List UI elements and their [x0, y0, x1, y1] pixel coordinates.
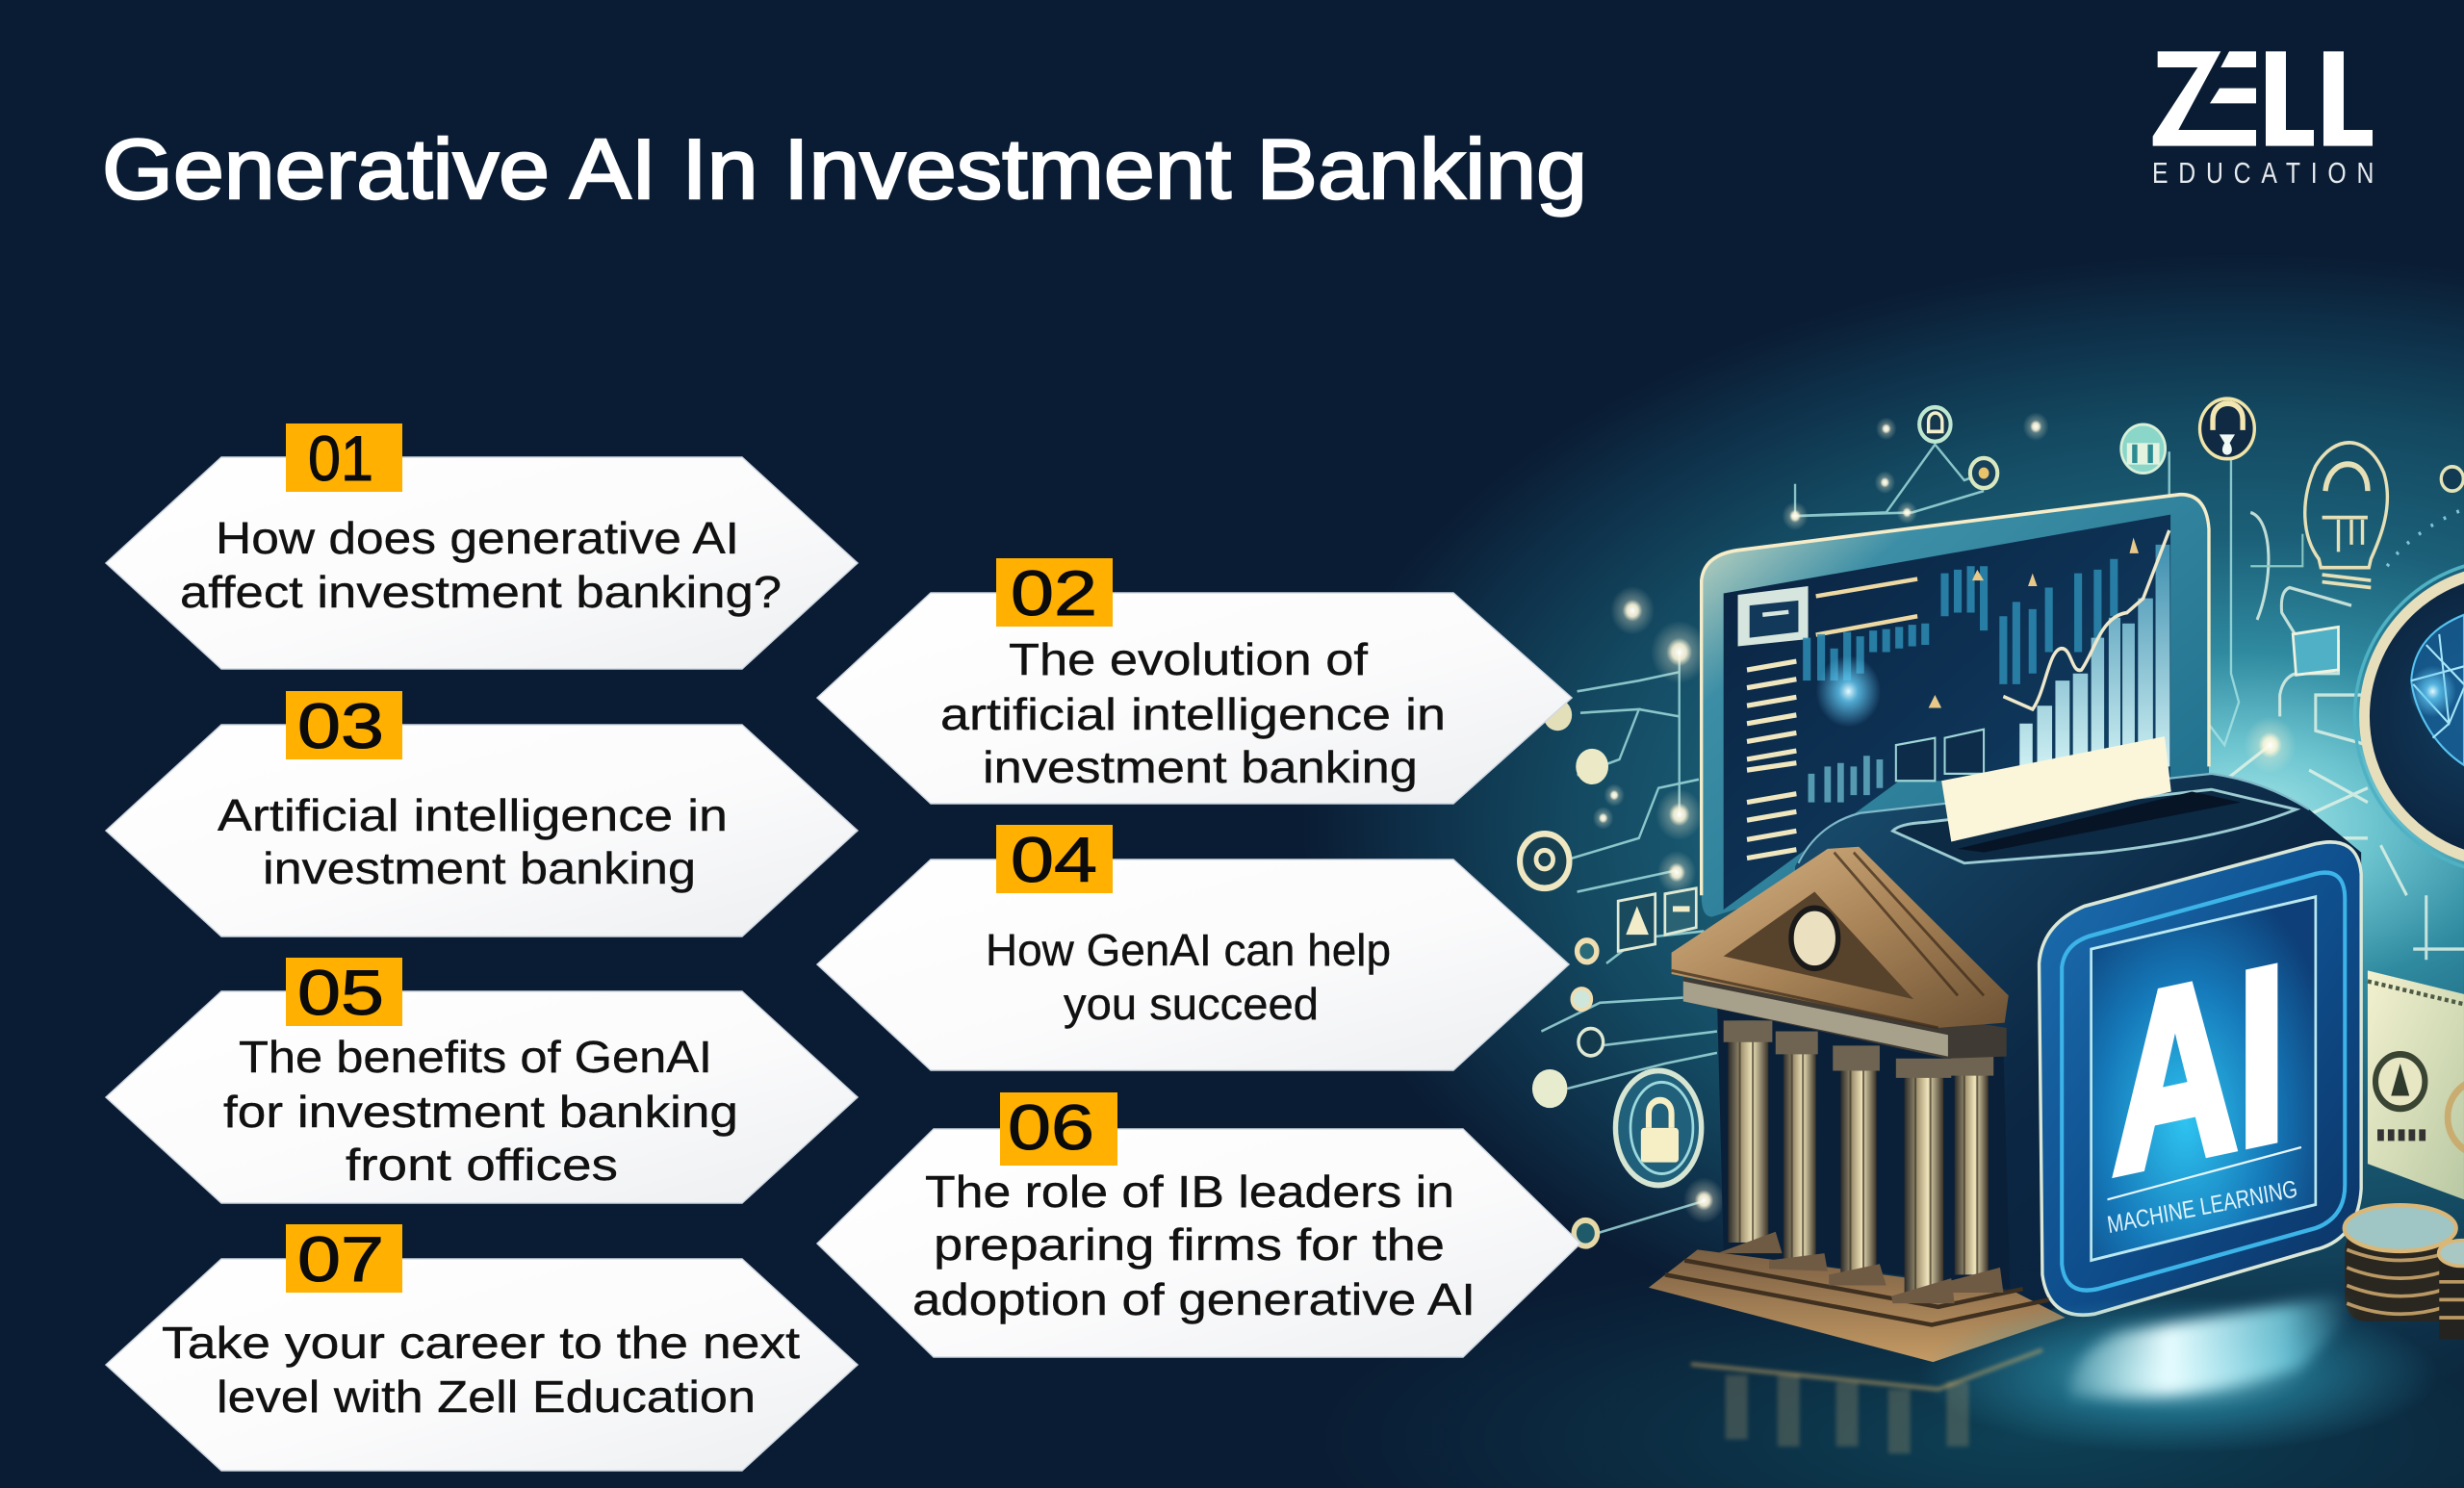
question text: investment banking — [983, 742, 1418, 792]
item 04 — [817, 824, 1569, 1070]
hexagon — [817, 593, 1572, 804]
question text — [223, 1032, 738, 1190]
illustration: AI banking scene — [598, 0, 2464, 1488]
frieze — [1683, 978, 2007, 1059]
rising chart bars — [1929, 530, 2169, 766]
circuit lines left — [1541, 445, 2239, 1235]
circuit lines right — [2224, 512, 2464, 960]
question text: Take your career to the next — [162, 1318, 800, 1368]
monitor screen — [1724, 515, 2170, 910]
question text: The benefits of GenAI — [239, 1032, 712, 1082]
logo: Zell Education — [2152, 51, 2374, 190]
item 02 — [817, 557, 1572, 804]
roof — [1672, 847, 2009, 1028]
question text: The evolution of — [1009, 634, 1368, 684]
question text: adoption of generative AI — [912, 1274, 1476, 1324]
question text — [940, 634, 1446, 792]
question text — [912, 1167, 1476, 1324]
logo word EDUCATION: EDUCATION — [2152, 156, 2374, 190]
question text — [218, 790, 728, 893]
number: 04 — [1011, 824, 1097, 895]
hexagon — [106, 991, 858, 1203]
small icons left — [1520, 834, 1696, 1246]
question text: The role of IB leaders in — [925, 1167, 1454, 1217]
dark portico — [1717, 995, 2010, 1289]
item 06 — [817, 1091, 1580, 1357]
screen widgets — [1738, 559, 2114, 859]
number: 01 — [308, 423, 373, 494]
question text: preparing firms for the — [934, 1219, 1445, 1270]
small circle top right — [2387, 467, 2464, 566]
question text: for investment banking — [223, 1087, 738, 1137]
badge — [286, 691, 402, 759]
question text: front offices — [346, 1140, 618, 1190]
item 03 — [106, 690, 858, 936]
question text — [180, 513, 782, 617]
question text: level with Zell Education — [217, 1372, 756, 1422]
icon: light bulb — [2250, 443, 2387, 588]
question text: How GenAI can help — [986, 925, 1391, 975]
question text: affect investment banking? — [180, 567, 782, 617]
icon: lock ring — [1615, 1070, 1702, 1185]
question text: you succeed — [1064, 979, 1319, 1029]
paper — [1941, 736, 2171, 841]
logo letters ZELL — [2153, 51, 2373, 146]
number: 05 — [297, 957, 384, 1028]
number: 03 — [297, 690, 384, 761]
machine body and paper — [1795, 736, 2361, 1311]
question text: investment banking — [263, 843, 696, 893]
bank building — [1649, 847, 2066, 1362]
item 05 — [106, 957, 858, 1203]
question text: artificial intelligence in — [940, 689, 1446, 739]
hexagon — [817, 859, 1569, 1070]
question text — [986, 925, 1391, 1029]
hexagon — [106, 457, 858, 669]
badge — [1000, 1092, 1117, 1166]
AI letters: AI — [2113, 913, 2286, 1226]
glowing nodes — [1543, 412, 2297, 1223]
question text: Artificial intelligence in — [218, 790, 728, 840]
badge — [996, 558, 1113, 627]
floor reflections — [1691, 1296, 2439, 1453]
hexagon — [106, 1259, 858, 1471]
brain mesh — [2411, 615, 2464, 765]
number: 07 — [297, 1223, 384, 1295]
icons top — [1919, 398, 2254, 488]
number: 02 — [1011, 557, 1097, 629]
question text: How does generative AI — [216, 513, 739, 563]
item 01 — [106, 423, 858, 669]
monitor frame — [1702, 495, 2209, 917]
question text — [162, 1318, 800, 1422]
title: Generative AI In Investment Banking — [102, 121, 1587, 217]
item 07 — [106, 1223, 858, 1471]
magnifier with brain mesh — [2354, 559, 2464, 874]
background glow — [598, 0, 2464, 1488]
hexagon — [817, 1129, 1580, 1357]
AI panel — [2040, 842, 2361, 1315]
hexagon — [106, 725, 858, 936]
badge — [286, 958, 402, 1026]
monitor with charts — [1702, 495, 2209, 917]
number: 06 — [1008, 1091, 1094, 1163]
columns — [1717, 1020, 2003, 1303]
inner panel — [2092, 897, 2316, 1261]
banknote — [2368, 970, 2464, 1199]
circuit card — [2293, 627, 2339, 675]
pediment medallion — [1791, 909, 1838, 968]
machine learning label: MACHINE LEARNING — [2105, 1175, 2299, 1239]
badge — [286, 423, 402, 492]
badge — [996, 825, 1113, 893]
coins — [2345, 1205, 2464, 1339]
steps — [1649, 1249, 2066, 1362]
badge — [286, 1224, 402, 1293]
